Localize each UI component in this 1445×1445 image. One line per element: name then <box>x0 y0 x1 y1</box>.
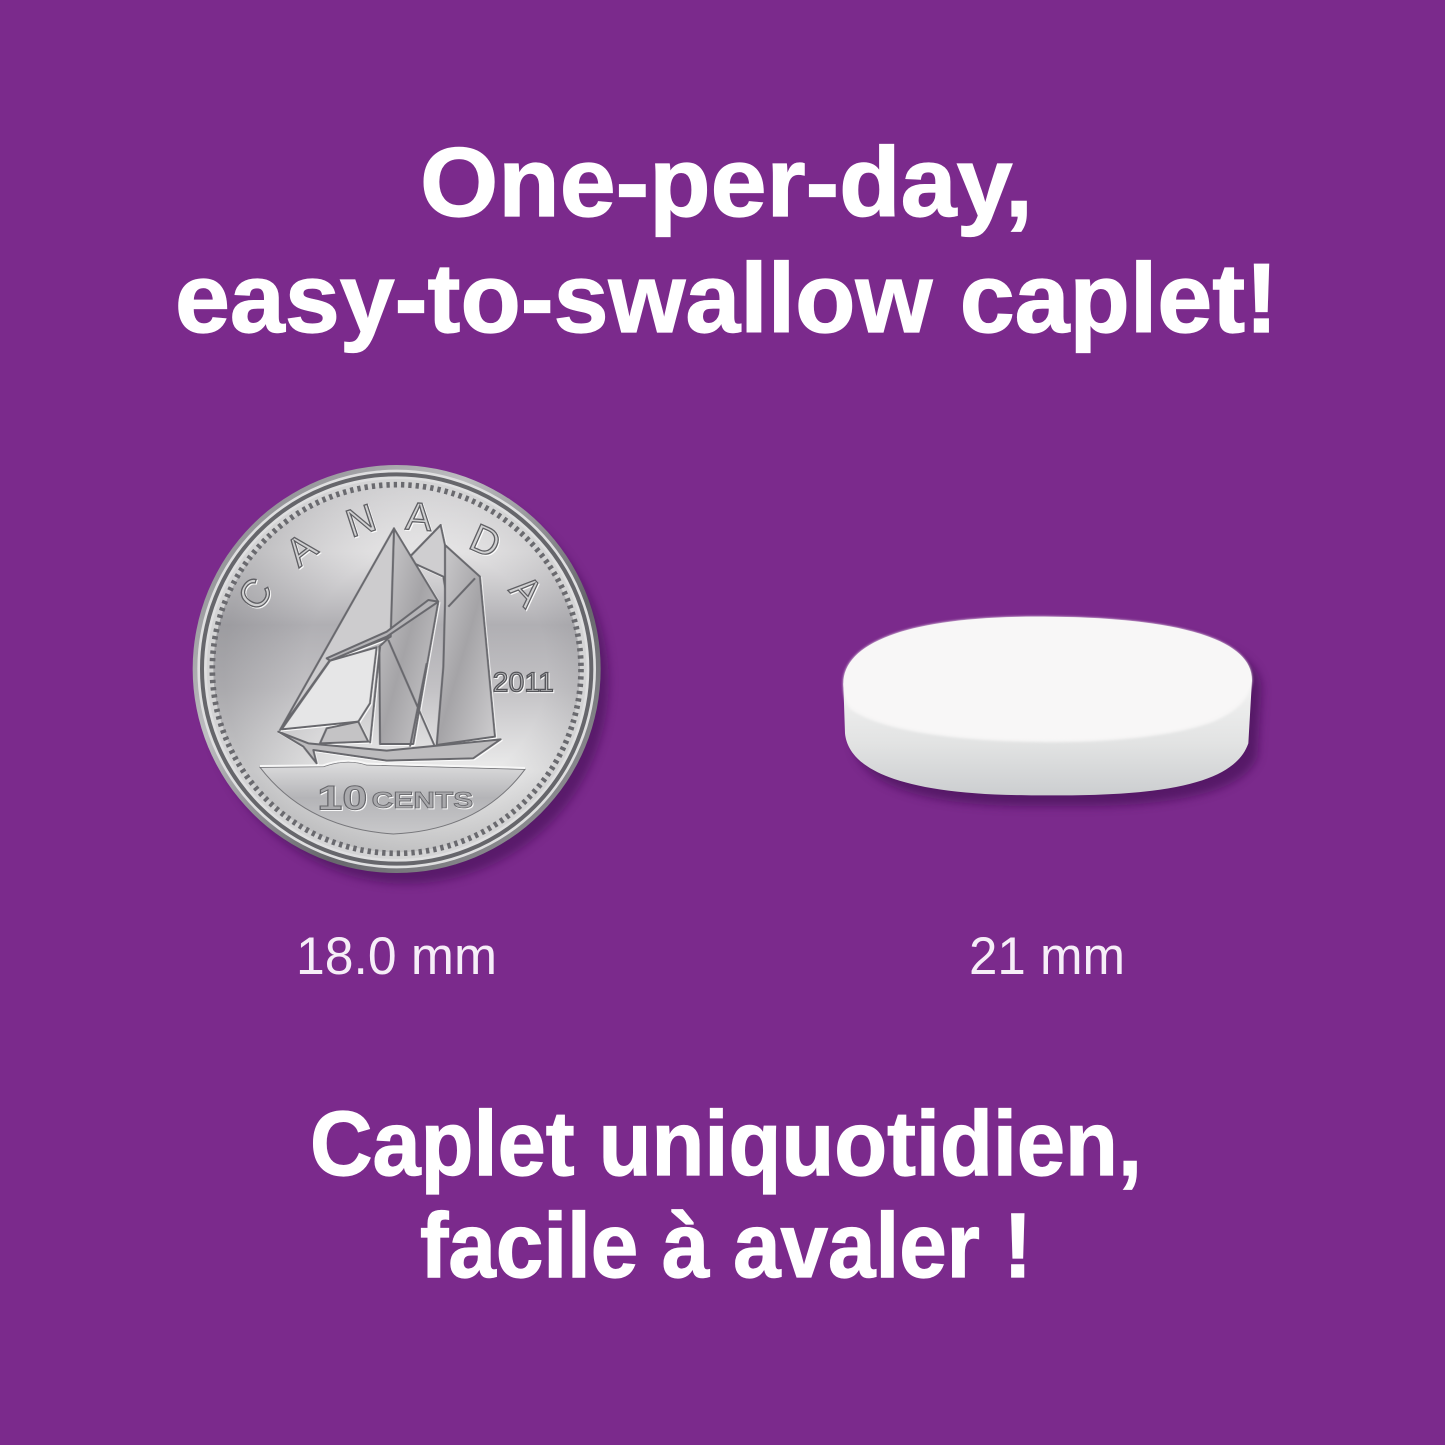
sea and denomination: CENTS <box>372 787 473 813</box>
title: English heading <box>175 127 1278 353</box>
icon: white caplet <box>843 617 1262 806</box>
title: English heading: easy-to-swallow caplet! <box>175 243 1278 353</box>
coin date: 2011 <box>493 667 554 698</box>
icon: Canadian ten cent coin <box>193 465 609 884</box>
coin lettering: CANADA: A <box>404 494 434 540</box>
title: French heading: Caplet uniquotidien, <box>310 1093 1142 1195</box>
coin lettering: CANADA: N <box>341 496 381 546</box>
title: French heading <box>310 1093 1142 1297</box>
title: French heading: facile à avaler ! <box>420 1195 1032 1297</box>
sea and denomination: 10 <box>317 779 367 817</box>
label: coin size: 18.0 mm <box>296 927 497 986</box>
coin lettering: CANADA: D <box>463 516 507 567</box>
coin lettering: CANADA <box>229 494 552 618</box>
sea and denomination <box>260 761 525 834</box>
coin lettering: CANADA: C <box>229 570 282 618</box>
title: English heading: One-per-day, <box>420 127 1033 237</box>
coin lettering: CANADA: A <box>277 524 326 575</box>
label: caplet size: 21 mm <box>969 927 1125 986</box>
coin lettering: CANADA: A <box>501 567 552 616</box>
schooner <box>278 525 501 763</box>
